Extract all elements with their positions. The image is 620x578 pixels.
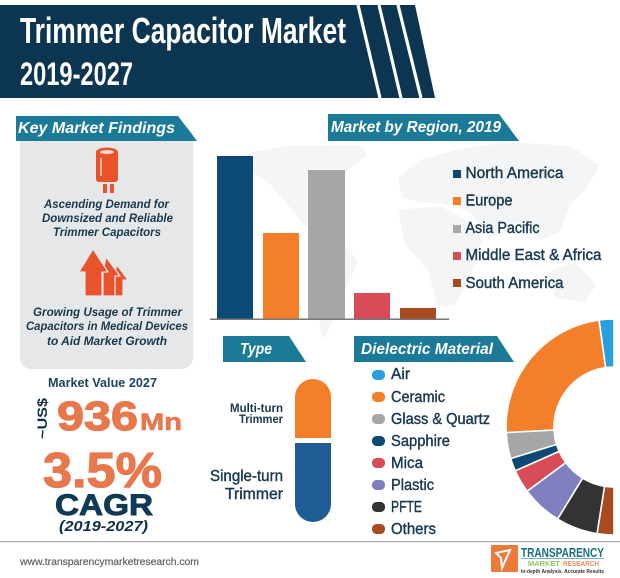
logo: transparency market research — [491, 545, 604, 575]
chart: type capsule — [295, 379, 331, 522]
labels: type: Trimmer — [225, 486, 283, 503]
label: market value 2027: Market Value 2027 — [48, 375, 157, 390]
label: us dollar: ~US$ — [34, 398, 50, 439]
title: 2019-2027 — [20, 56, 133, 92]
label: cagr: CAGR — [55, 489, 153, 522]
labels: type: Multi-turn — [230, 403, 283, 415]
text: ascending demand: Ascending Demand for — [43, 197, 170, 211]
value: 3.5%: 3.5% — [43, 444, 162, 498]
legend: regions: Middle East & Africa — [466, 247, 602, 264]
legend: dielectric material: Others — [391, 521, 436, 538]
heading: type: Type — [240, 341, 272, 358]
heading: dielectric material — [354, 336, 514, 362]
legend: dielectric material: Plastic — [391, 477, 434, 494]
heading: dielectric material: Dielectric Material — [361, 341, 494, 358]
footer — [0, 541, 620, 575]
heading: key market findings — [16, 116, 197, 141]
text: growing usage: Growing Usage of Trimmer — [33, 305, 183, 319]
text: ascending demand: Downsized and Reliable — [42, 211, 173, 225]
cagr block — [43, 444, 162, 535]
legend: dielectric material: Ceramic — [391, 389, 445, 406]
legend: dielectric material — [372, 366, 490, 538]
icon: growth arrows — [79, 249, 128, 296]
text: ascending demand — [42, 197, 173, 239]
labels: type: Trimmer — [239, 414, 284, 426]
heading: market by region — [328, 114, 519, 141]
logo: transparency market research: MARKET — [528, 561, 561, 568]
heading: key market findings: Key Market Findings — [18, 120, 175, 137]
labels: type: Single-turn — [210, 468, 283, 485]
text: growing usage: Capacitors in Medical Devices — [26, 319, 188, 333]
legend: dielectric material: Air — [391, 366, 410, 383]
value: 936: 936 — [57, 393, 138, 439]
legend: dielectric material: Glass & Quartz — [391, 411, 490, 428]
title — [20, 10, 346, 92]
world map background — [250, 142, 600, 340]
website url: www.transparencymarketresearch.com — [19, 556, 199, 568]
text: growing usage: to Aid Market Growth — [47, 334, 167, 348]
logo: transparency market research: RESEARCH — [563, 561, 599, 568]
legend: regions: Europe — [466, 192, 512, 210]
header stripes — [358, 5, 421, 98]
heading: market by region: Market by Region, 2019 — [331, 119, 501, 136]
text: ascending demand: Trimmer Capacitors — [53, 225, 161, 239]
bar chart: market by region — [210, 156, 449, 320]
labels: type — [210, 403, 284, 503]
header banner — [0, 5, 435, 98]
panel: key market findings — [16, 116, 197, 369]
heading: type — [223, 336, 306, 362]
title: Trimmer Capacitor Market — [20, 10, 346, 51]
donut chart: dielectric material — [506, 319, 614, 535]
market value block — [34, 375, 182, 439]
icon: capacitor — [96, 148, 118, 193]
text: growing usage — [26, 305, 188, 348]
legend: regions: South America — [466, 275, 564, 292]
label: cagr period: (2019-2027) — [59, 519, 148, 535]
legend: dielectric material: PFTE — [391, 499, 422, 516]
unit: Mn: Mn — [140, 409, 182, 436]
logo: transparency market research: In-depth Analysis. Accurate Results — [521, 569, 604, 575]
legend: regions — [453, 165, 602, 292]
legend: dielectric material: Mica — [391, 455, 423, 472]
legend: regions: Asia Pacific — [466, 220, 540, 237]
legend: regions: North America — [466, 165, 564, 182]
legend: dielectric material: Sapphire — [391, 433, 450, 450]
